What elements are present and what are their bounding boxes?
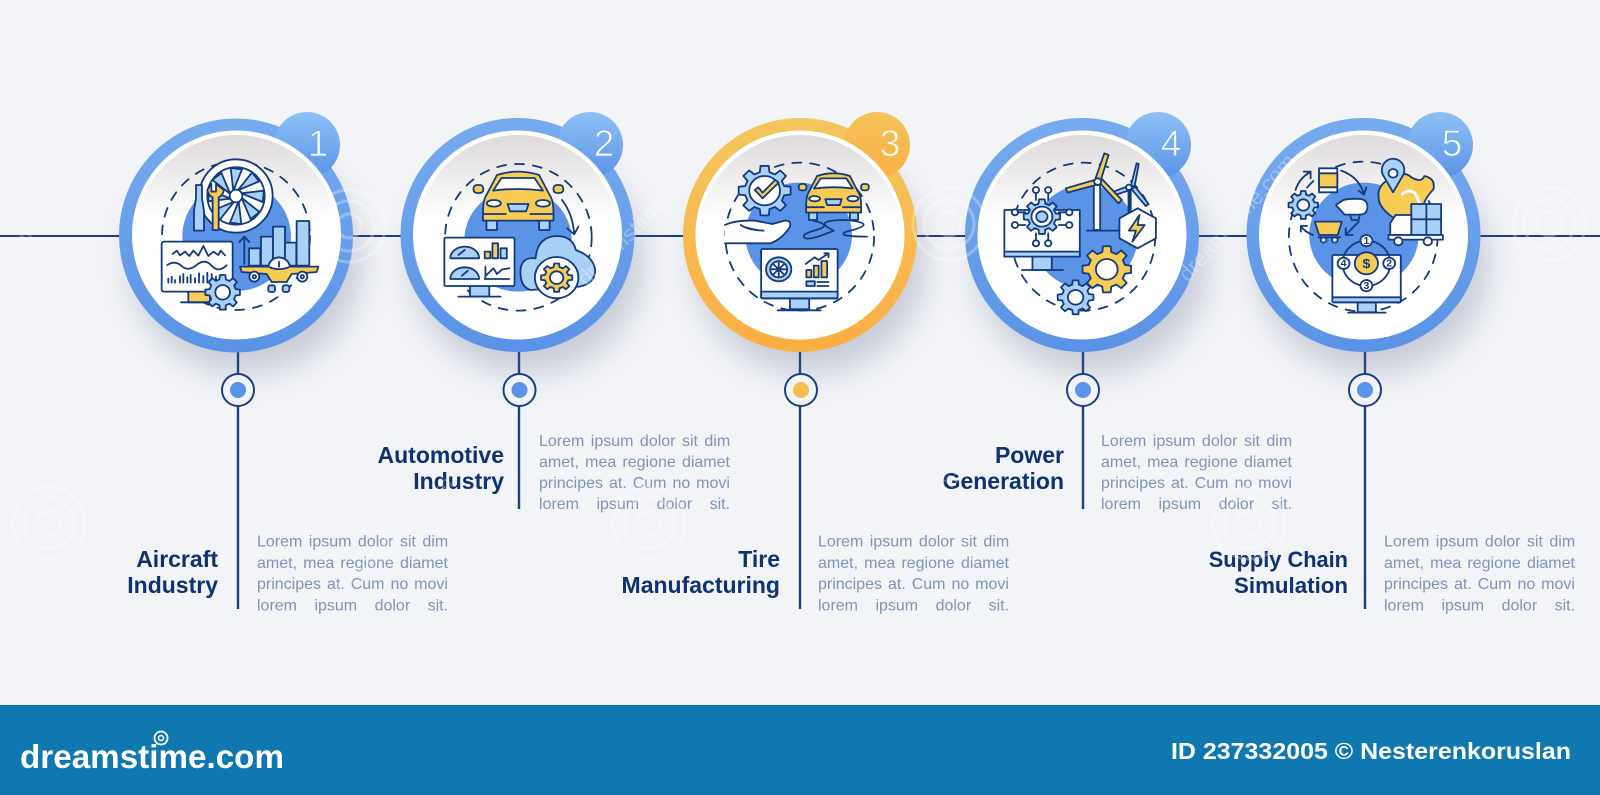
icon: supply chain simulation <box>1289 159 1443 313</box>
body text 2: principes at. Cum no movi <box>539 475 730 492</box>
ring 1 <box>119 118 353 352</box>
ring 5 <box>1246 118 1480 352</box>
panel: step 1 aircraft industry <box>119 112 449 614</box>
connector line 3 <box>799 350 801 609</box>
footer band <box>0 705 1600 795</box>
icon: aircraft simulation <box>162 159 318 310</box>
node dot 1 <box>222 374 254 406</box>
heading 4: Power <box>995 442 1064 468</box>
inner disc 4 <box>978 130 1186 340</box>
body text 4: Lorem ipsum dolor sit dim <box>1101 433 1292 450</box>
number badge 5 <box>1407 112 1473 178</box>
node dot 2 <box>504 374 536 406</box>
node dot 4 <box>1067 374 1099 406</box>
body text 4: lorem ipsum dolor sit. <box>1101 496 1292 513</box>
icon: supply chain simulation: 3 <box>1363 281 1370 292</box>
number 5: 5 <box>1442 123 1462 164</box>
heading 1: Industry <box>127 572 218 598</box>
circle shadow 4 <box>976 150 1208 374</box>
body text 3: lorem ipsum dolor sit. <box>818 598 1009 614</box>
body text 3: amet, mea regione diamet <box>818 555 1010 572</box>
icon: supply chain simulation: 1 <box>1363 236 1370 247</box>
watermark overlay: dreamstime.com <box>1173 149 1301 286</box>
body text 4: principes at. Cum no movi <box>1101 475 1292 492</box>
logo: dreamstime.com: dreamstime.com <box>20 738 284 775</box>
icon: supply chain simulation: 4 <box>1341 259 1347 270</box>
number badge 3 <box>844 112 910 178</box>
body text 1: principes at. Cum no movi <box>257 576 448 593</box>
heading 1: Aircraft <box>136 546 218 572</box>
body text 5: Lorem ipsum dolor sit dim <box>1384 534 1575 550</box>
inner disc 5 <box>1259 130 1468 340</box>
icon: tire manufacturing <box>725 163 874 311</box>
body text 2: lorem ipsum dolor sit. <box>539 496 730 513</box>
ring 3 <box>683 118 917 352</box>
heading 2: Industry <box>413 468 504 494</box>
body text 1: Lorem ipsum dolor sit dim <box>257 534 448 550</box>
ring 2 <box>400 118 634 352</box>
heading 5: Simulation <box>1234 573 1348 598</box>
icon: power generation <box>1004 153 1156 314</box>
panel: step 2 automotive industry <box>378 112 731 513</box>
heading 3: Tire <box>738 546 780 572</box>
inner disc 2 <box>413 130 622 340</box>
node dot 5 <box>1349 374 1381 406</box>
body text 1: lorem ipsum dolor sit. <box>257 598 448 614</box>
number 3: 3 <box>880 123 900 164</box>
number badge 1 <box>274 112 340 178</box>
circle shadow 3 <box>694 150 926 374</box>
circle shadow 2 <box>411 150 643 374</box>
body text 5: principes at. Cum no movi <box>1384 576 1575 593</box>
heading 2: Automotive <box>378 442 504 468</box>
watermark overlay: dreamstime.com <box>572 158 705 291</box>
circle shadow 5 <box>1257 150 1489 374</box>
connector line 5 <box>1364 350 1366 609</box>
icon: supply chain simulation: $ <box>1362 256 1371 271</box>
body text 2: amet, mea regione diamet <box>539 454 731 471</box>
body text 3: Lorem ipsum dolor sit dim <box>818 534 1009 550</box>
circle shadow 1 <box>130 150 362 374</box>
inner disc 3 <box>696 130 904 340</box>
body text 2: Lorem ipsum dolor sit dim <box>539 433 730 450</box>
watermark overlay: dreamstime.com <box>326 471 459 604</box>
connector line 1 <box>237 350 239 609</box>
connector line 2 <box>518 350 520 509</box>
inner disc 1 <box>132 130 341 340</box>
number 2: 2 <box>594 123 614 164</box>
watermark overlay <box>0 143 1600 604</box>
number badge 2 <box>557 112 623 178</box>
heading 4: Generation <box>943 468 1064 494</box>
image id and author credit: ID 237332005 © Nesterenkoruslan <box>1171 738 1571 764</box>
heading 3: Manufacturing <box>622 572 780 598</box>
horizontal timeline line <box>0 235 1600 237</box>
body text 5: amet, mea regione diamet <box>1384 555 1576 572</box>
panel: step 5 supply chain simulation <box>1209 112 1576 614</box>
panel: step 4 power generation <box>943 112 1293 513</box>
panel: step 3 tire manufacturing <box>622 112 1010 614</box>
connector line 4 <box>1082 350 1084 509</box>
number 1: 1 <box>308 123 328 164</box>
icon: automotive simulation <box>444 164 595 311</box>
number 4: 4 <box>1161 123 1181 164</box>
icon: supply chain simulation: 2 <box>1386 259 1392 270</box>
number badge 4 <box>1125 112 1191 178</box>
node dot 3 <box>785 374 817 406</box>
body text 3: principes at. Cum no movi <box>818 576 1009 593</box>
body text 1: amet, mea regione diamet <box>257 555 449 572</box>
watermark overlay: dreamstime.com <box>901 396 1034 529</box>
heading 5: Supply Chain <box>1209 547 1348 572</box>
body text 5: lorem ipsum dolor sit. <box>1384 598 1575 614</box>
ring 4 <box>965 118 1199 352</box>
body text 4: amet, mea regione diamet <box>1101 454 1293 471</box>
